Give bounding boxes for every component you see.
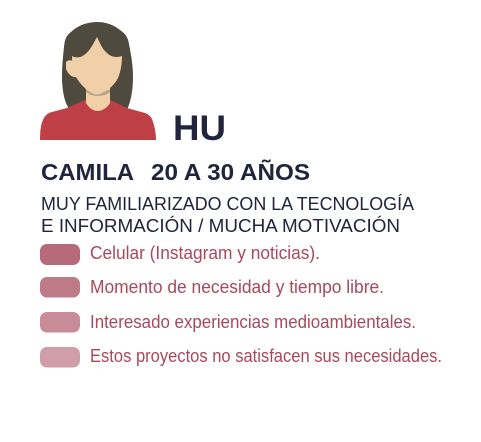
ear	[66, 60, 77, 77]
swatch 3	[40, 312, 80, 332]
swatch 2	[40, 277, 80, 298]
neck shadow	[86, 90, 110, 96]
shirt	[40, 100, 156, 140]
face	[72, 37, 122, 94]
swatch 1	[40, 244, 80, 265]
list item 4: Estos proyectos no satisfacen sus necesidades.	[90, 346, 442, 366]
description line 1: MUY FAMILIARIZADO CON LA TECNOLOGÍA	[41, 194, 414, 214]
list item 2: Momento de necesidad y tiempo libre.	[90, 277, 384, 297]
neck	[86, 86, 110, 111]
heading: name: CAMILA	[41, 159, 134, 185]
hair	[62, 22, 133, 110]
icon: woman avatar	[40, 22, 156, 140]
list item 3: Interesado experiencias medioambientales.	[90, 312, 416, 332]
swatch 4	[40, 347, 80, 368]
title: HU: HU	[173, 109, 226, 148]
description line 2: E INFORMACIÓN / MUCHA MOTIVACIÓN	[41, 215, 400, 236]
list item 1: Celular (Instagram y noticias).	[90, 243, 320, 263]
heading: age range: 20 A 30 AÑOS	[151, 158, 310, 185]
